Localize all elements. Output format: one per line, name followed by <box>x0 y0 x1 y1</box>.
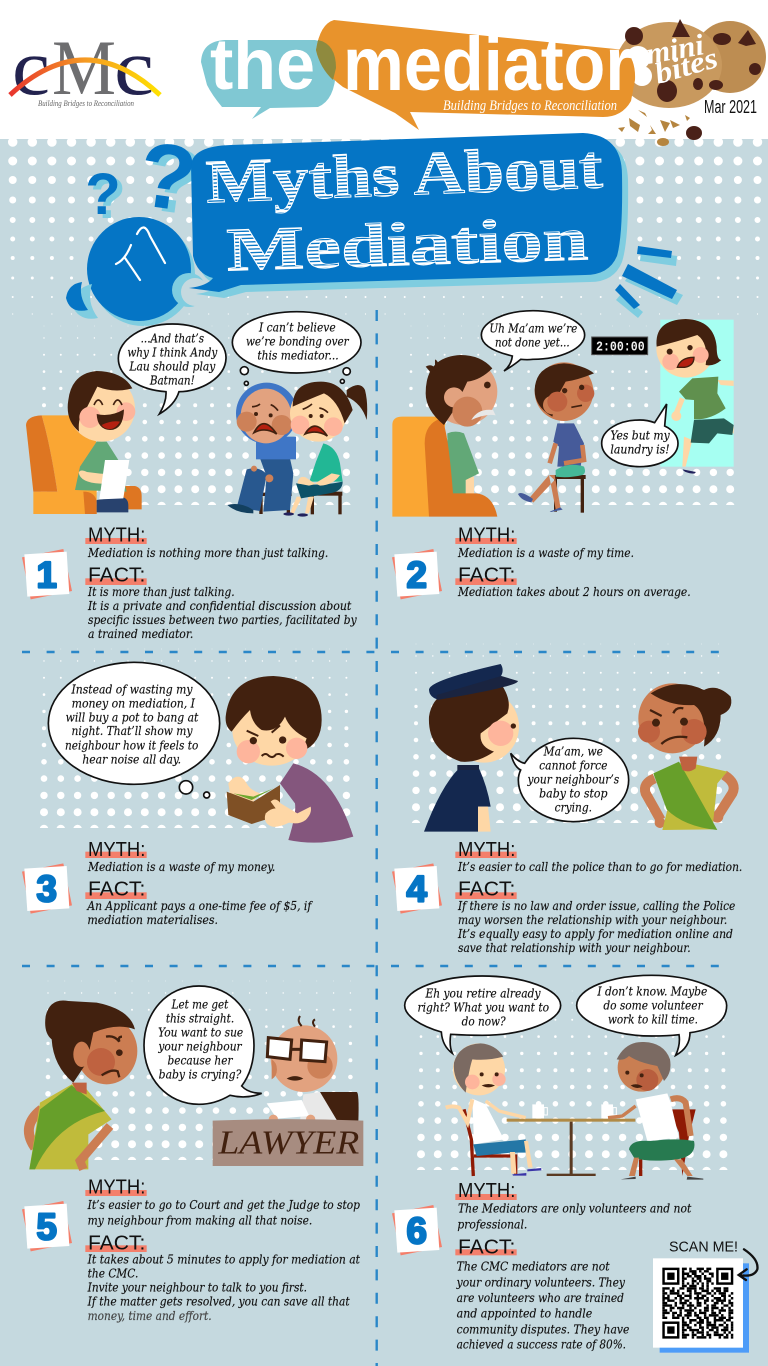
icon: question marks: ? <box>139 127 209 236</box>
illustration: man in armchair <box>392 355 497 517</box>
illustration: retirees at table <box>446 1042 703 1180</box>
myth and fact text 5 <box>85 1177 360 1323</box>
myth and fact text 6: and appointed to handle <box>457 1307 592 1321</box>
logo: CMC <box>10 24 160 112</box>
myth and fact text 3: MYTH: <box>88 839 145 861</box>
speech bubble: work to kill time. <box>608 1012 698 1026</box>
panel 1 <box>22 312 367 641</box>
lawyer sign: LAWYER <box>217 1124 359 1161</box>
myth and fact text 1: specific issues between two parties, facilitated by <box>88 613 358 627</box>
myth and fact text 1: MYTH: <box>88 525 145 547</box>
speech bubble: baby is crying? <box>159 1068 242 1082</box>
myth and fact text 6: The Mediators are only volunteers and not <box>458 1202 691 1216</box>
myth and fact text 6: FACT: <box>458 1236 515 1258</box>
number card 5 <box>22 1201 72 1251</box>
myth and fact text 2 <box>455 525 691 599</box>
speech bubble: right? What you want to <box>417 1001 549 1015</box>
icon: question marks: ? <box>85 162 121 227</box>
speech bubble: Let me get <box>171 998 228 1012</box>
myth and fact text 2: Mediation is a waste of my time. <box>457 546 634 560</box>
masthead: the mediator speech bubbles: Building Bridges to Reconciliation <box>443 98 617 114</box>
thought bubble: hear noise all day. <box>82 752 181 766</box>
panel 4 <box>392 664 742 955</box>
myth and fact text 3: FACT: <box>88 879 145 901</box>
thought bubble: this mediator... <box>257 349 339 363</box>
speech bubble: You want to sue <box>158 1026 243 1040</box>
myth and fact text 4: may worsen the relationship with your neighbour. <box>458 913 727 927</box>
halftones per panel <box>44 326 364 506</box>
speech bubble: your neighbour’s <box>527 772 619 786</box>
header white band <box>0 0 768 139</box>
speech bubble: cannot force <box>539 758 607 772</box>
speech bubble: Uh Ma’am we’re <box>489 322 577 336</box>
illustration: seated woman <box>518 362 594 513</box>
speech bubble: not done yet... <box>495 336 570 350</box>
speech bubble <box>144 986 262 1104</box>
thought bubble <box>48 662 220 798</box>
icon: question marks: ? <box>90 166 126 231</box>
speech bubble <box>511 738 629 822</box>
speech bubble: your neighbour <box>157 1040 243 1054</box>
dashed dividers <box>22 310 735 1366</box>
speech bubble: I don’t know. Maybe <box>596 984 707 998</box>
logo: CMC: c <box>114 24 154 112</box>
logo: CMC: c <box>12 24 50 112</box>
speech bubble <box>118 324 226 414</box>
myth and fact text 6: professional. <box>457 1218 527 1232</box>
myth and fact text 6: MYTH: <box>458 1180 515 1202</box>
myth and fact text 6: your ordinary volunteers. They <box>456 1276 626 1290</box>
myth and fact text 2: FACT: <box>458 565 515 587</box>
myth and fact text 4: It’s equally easy to apply for mediation online and <box>457 927 733 941</box>
myth and fact text 1: Mediation is nothing more than just talking. <box>87 546 328 560</box>
myth and fact text 1 <box>85 525 358 641</box>
number card 4 <box>392 863 442 914</box>
illustration: angry woman with wallet <box>226 676 353 843</box>
thought bubble: Instead of wasting my <box>71 682 193 696</box>
icon: cookies mini bites: bites <box>651 41 721 91</box>
myth and fact text 5: FACT: <box>88 1232 145 1254</box>
timer 2:00:00: 2:00:00 <box>596 340 645 356</box>
thought bubble: we’re bonding over <box>246 335 350 349</box>
speech bubble <box>405 976 561 1053</box>
speech bubble <box>602 404 678 467</box>
myth and fact text 5: If the matter gets resolved, you can save all that <box>87 1295 350 1309</box>
title bubble: Myths About Mediation <box>189 133 628 298</box>
thought bubble: money on mediation, I <box>72 696 196 710</box>
icon: question marks: ? <box>132 123 202 232</box>
speech bubble: do now? <box>462 1014 506 1028</box>
number card 1 <box>22 549 72 599</box>
myth and fact text 4: FACT: <box>458 879 515 901</box>
illustration: angry neighbour <box>638 683 734 830</box>
number card 2 <box>392 549 442 599</box>
panel 2 <box>392 311 734 599</box>
myth and fact text 5: my neighbour from making all that noise. <box>88 1214 312 1228</box>
myth and fact text 5: Invite your neighbour to talk to you first. <box>87 1281 307 1295</box>
thought bubble: will buy a pot to bang at <box>66 710 198 724</box>
panel 5 <box>22 986 363 1323</box>
illustration: lawyer at desk <box>267 1016 359 1124</box>
myth and fact text 6: achieved a success rate of 80%. <box>457 1338 626 1352</box>
speech bubble: Lau should play <box>128 360 216 374</box>
speech bubble <box>577 975 727 1055</box>
icon: blue speech head <box>66 217 209 326</box>
myth and fact text 2: MYTH: <box>458 525 515 547</box>
myth and fact text 3: mediation materialises. <box>87 913 218 927</box>
myth and fact text 1: FACT: <box>88 565 145 587</box>
speech bubble: Ma’am, we <box>543 744 603 758</box>
speech bubble: Eh you retire already <box>425 987 541 1001</box>
myth and fact text 6: are volunteers who are trained <box>457 1291 624 1305</box>
myth and fact text 4: save that relationship with your neighbour. <box>458 941 691 955</box>
speech bubble: laundry is! <box>610 443 670 457</box>
myth and fact text 1: It is a private and confidential discussion about <box>87 599 351 613</box>
myth and fact text 6: community disputes. They have <box>457 1323 629 1337</box>
title bubble: Myths About Mediation: Mediation <box>225 205 589 285</box>
panel 6 <box>392 975 757 1353</box>
number card 6 <box>392 1205 442 1255</box>
masthead: the mediator speech bubbles: mediator <box>343 22 632 107</box>
speech bubble: Batman! <box>149 373 195 387</box>
number card 3: 3 <box>36 869 57 910</box>
scan me label and arrow: SCAN ME! <box>669 1239 738 1255</box>
icon: emphasis bars <box>615 246 683 318</box>
illustration: neighbour side view <box>29 1000 137 1169</box>
thought bubble: night. That’ll show my <box>71 724 193 738</box>
speech bubble: ...And that’s <box>141 331 204 345</box>
myth and fact text 1: a trained mediator. <box>88 627 193 641</box>
masthead: the mediator speech bubbles <box>201 20 635 130</box>
speech bubble: crying. <box>555 800 592 814</box>
myth and fact text 4: MYTH: <box>458 839 515 861</box>
myth and fact text 4 <box>455 839 742 955</box>
speech bubble: Yes but my <box>610 428 671 442</box>
number card 3 <box>22 863 72 914</box>
halftone dots behind title <box>13 142 768 314</box>
number card 5: 5 <box>36 1206 57 1247</box>
myth and fact text 5: It takes about 5 minutes to apply for mediation at <box>87 1253 360 1267</box>
panel 3 <box>22 662 353 927</box>
myth and fact text 3 <box>85 839 313 927</box>
myth and fact text 6: The CMC mediators are not <box>457 1260 610 1274</box>
number card 1: 1 <box>36 554 57 595</box>
thought bubble: I can’t believe <box>258 320 336 334</box>
myth and fact text 5: money, time and effort. <box>88 1309 212 1323</box>
illustration: two neighbours <box>227 382 367 517</box>
number card 6: 6 <box>406 1210 427 1251</box>
illustration: mediator in armchair <box>26 371 142 514</box>
speech bubble: this straight. <box>166 1012 234 1026</box>
logo: CMC: M <box>52 24 116 111</box>
number card 4: 4 <box>406 869 427 910</box>
icon: question marks <box>85 123 209 236</box>
thought bubble <box>232 312 361 385</box>
thought bubble: neighbour how it feels to <box>65 738 198 752</box>
QR code <box>653 1258 749 1353</box>
scan me label and arrow <box>669 1239 757 1280</box>
speech bubble: baby to stop <box>539 786 608 800</box>
myth and fact text 5: the CMC. <box>88 1267 138 1281</box>
speech bubble: why I think Andy <box>127 346 218 360</box>
speech bubble <box>481 311 585 371</box>
myth and fact text 5: It’s easier to go to Court and get the Judge to stop <box>87 1198 360 1212</box>
myth and fact text 3: An Applicant pays a one-time fee of $5, if <box>86 899 313 913</box>
icon: cookies mini bites <box>616 19 766 146</box>
myth and fact text 3: Mediation is a waste of my money. <box>87 860 275 874</box>
myth and fact text 5: MYTH: <box>88 1177 145 1199</box>
speech bubble: because her <box>167 1054 233 1068</box>
icon: cookies mini bites: mini <box>643 28 707 71</box>
masthead: the mediator speech bubbles: the <box>210 25 315 105</box>
illustration: woman in window <box>656 319 734 474</box>
myth and fact text 6 <box>455 1180 691 1352</box>
title bubble: Myths About Mediation: Myths About <box>205 133 604 217</box>
lawyer sign <box>213 1119 363 1166</box>
myth and fact text 2: Mediation takes about 2 hours on average. <box>457 585 691 599</box>
speech bubble: do some volunteer <box>603 998 704 1012</box>
logo: CMC: Building Bridges to Reconciliation <box>38 99 134 108</box>
number card 2: 2 <box>406 554 427 595</box>
illustration: police officer <box>424 664 519 832</box>
myth and fact text 1: It is more than just talking. <box>87 585 235 599</box>
